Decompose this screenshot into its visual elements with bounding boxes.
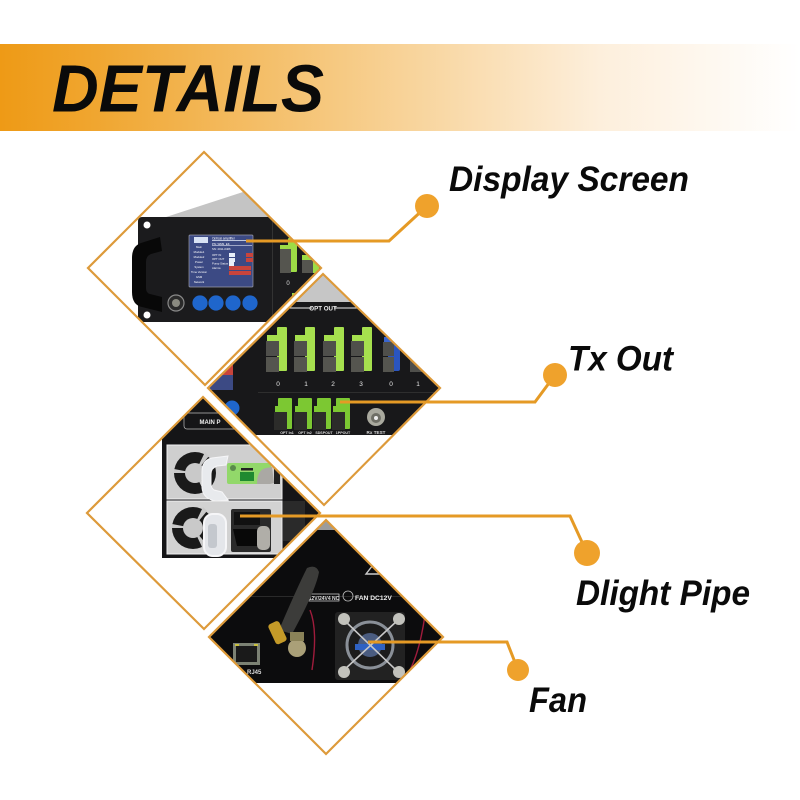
- main panel label: [184, 413, 244, 429]
- port numbers: 2: [331, 381, 335, 388]
- handle: [132, 237, 162, 312]
- label: fan: Fan: [529, 680, 587, 720]
- display screen: System: [194, 265, 204, 269]
- upper green connectors: [266, 327, 422, 372]
- panel: tx out photo: [210, 276, 438, 435]
- opt out label: [290, 306, 357, 310]
- network port: [233, 643, 262, 676]
- green fiber ports: [272, 220, 319, 320]
- network port: RJ45: [247, 670, 262, 676]
- display screen: Alarms: [212, 266, 221, 270]
- port numbers: 1: [416, 381, 420, 388]
- main panel label: MAIN P: [200, 420, 220, 426]
- header banner: [0, 44, 800, 131]
- leader: fan: [368, 642, 529, 681]
- port numbers: 0: [389, 381, 393, 388]
- key switch: [168, 295, 184, 311]
- display screen: Pump Status: [212, 262, 229, 266]
- port numbers: 3: [359, 381, 363, 388]
- display screen: SN: 2011-0406: [212, 247, 231, 251]
- antenna: [267, 567, 319, 657]
- title: DETAILS: [52, 52, 324, 126]
- port captions: Rx TEST: [367, 430, 386, 435]
- display screen: Main: [196, 245, 202, 249]
- panel: power supply photo: [162, 395, 327, 558]
- port captions: SDSPOUT: [315, 431, 333, 435]
- label: display screen: Display Screen: [449, 159, 689, 199]
- diamond frames: [87, 152, 443, 754]
- fan wiring: [310, 610, 425, 670]
- port numbers: 1: [304, 381, 308, 388]
- display screen: OPT IN: [212, 253, 221, 257]
- label: dlight pipe: Dlight Pipe: [576, 573, 750, 613]
- display screen: PN: WMS_EK: [212, 242, 230, 246]
- fan label: 12V/24V4 NC: [309, 596, 340, 602]
- fan label: [309, 591, 392, 602]
- port captions: OPT In1: [280, 431, 294, 435]
- panel: display screen photo: [132, 192, 328, 322]
- opt out label: OPT OUT: [309, 306, 337, 312]
- psu upper: [167, 445, 282, 501]
- display screen: Power: [195, 260, 203, 264]
- display screen: Module1: [194, 250, 205, 254]
- label: tx out: Tx Out: [568, 338, 675, 378]
- display screen: GSM: [196, 275, 203, 279]
- display screen: Time Version: [191, 270, 208, 274]
- display screen: Network: [194, 280, 205, 284]
- display screen: OPT OUT: [212, 257, 225, 261]
- rx test connector: [367, 408, 385, 426]
- lower green connectors: [274, 398, 350, 430]
- port captions: OPT In2: [298, 431, 312, 435]
- leader: display screen: [246, 194, 439, 241]
- port captions: 1PPOUT: [336, 431, 351, 435]
- leader: tx out: [340, 363, 567, 402]
- display screen: Optical amplifier: [212, 236, 236, 240]
- psu lower: [167, 501, 282, 556]
- display screen: [189, 235, 253, 287]
- fan label: FAN DC12V: [355, 595, 392, 602]
- port numbers: 0: [276, 381, 280, 388]
- front panel buttons: [192, 295, 258, 311]
- display screen: Module2: [194, 255, 205, 259]
- port captions: [280, 431, 386, 434]
- power inlet: [231, 509, 271, 552]
- cooling fan: [335, 612, 405, 680]
- leader: dlight pipe: [240, 516, 600, 566]
- panel: fan photo: [205, 518, 450, 683]
- port numbers: [276, 382, 420, 386]
- green fiber ports: 0: [286, 281, 290, 287]
